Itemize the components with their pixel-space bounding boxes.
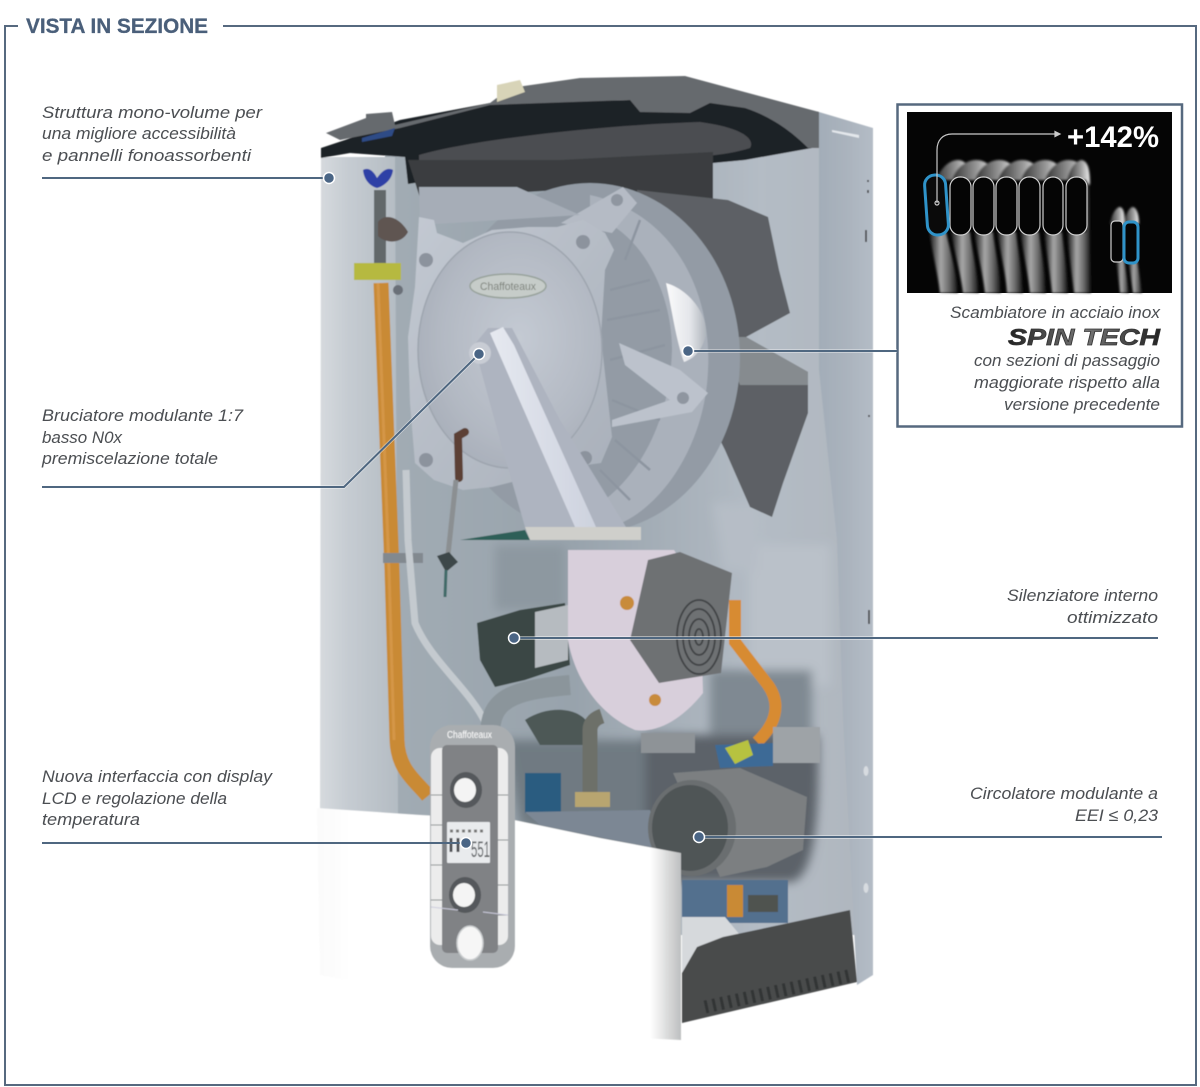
- dark rear ducts: [637, 190, 808, 517]
- interior shading: [495, 503, 830, 882]
- lower blue manifold: [682, 880, 788, 973]
- Spin Tech logo: SPIN TECH: [1008, 324, 1160, 350]
- right water pipe: [735, 600, 775, 742]
- fan motor: [630, 552, 732, 683]
- ignition electrode: [437, 432, 465, 597]
- heat exchanger body: [419, 183, 740, 533]
- annotation: circulator: Circolatore modulante a: [970, 784, 1158, 803]
- right side panel: [819, 112, 873, 985]
- lower knob: [449, 877, 481, 913]
- left wall: [320, 157, 398, 815]
- annotation: interface: temperatura: [42, 810, 140, 829]
- leader: structure: [42, 172, 334, 184]
- annotation: silencer: Silenziatore interno: [1007, 586, 1158, 605]
- circulator pump: [648, 768, 807, 877]
- boiler cutaway illustration: [317, 76, 873, 1040]
- callout text: maggiorate rispetto alla: [974, 373, 1160, 392]
- title: VISTA IN SEZIONE: [26, 15, 208, 38]
- annotation: circulator: [970, 784, 1159, 825]
- burner disc: [418, 232, 602, 468]
- brand logo: Chaffoteaux: [447, 730, 492, 741]
- percentage figure: +142%: [1067, 121, 1159, 154]
- leader: circulator: [694, 832, 1162, 842]
- dark band below cover: [408, 152, 713, 205]
- pressure gauge: [457, 926, 483, 960]
- annotation: structure: Struttura mono-volume per: [42, 103, 263, 122]
- leader: burner: [42, 348, 484, 487]
- tubes: [929, 160, 1142, 293]
- upper knob: [450, 772, 482, 808]
- lower interior pipework: [490, 685, 665, 850]
- annotation: interface: [42, 767, 274, 829]
- annotation: burner: Bruciatore modulante 1:7: [42, 406, 244, 425]
- annotation: burner: [41, 406, 244, 468]
- leader: interface: [42, 838, 472, 848]
- control panel: [430, 725, 515, 968]
- annotation: structure: e pannelli fonoassorbenti: [42, 146, 252, 165]
- LCD display: 551: [471, 837, 490, 862]
- burner arm: [460, 327, 641, 540]
- callout text: versione precedente: [1004, 395, 1160, 414]
- front white panel: [317, 808, 681, 1040]
- back wall: [385, 145, 855, 935]
- left gas pipe and fittings: [354, 169, 485, 796]
- annotation: structure: una migliore accessibilità: [42, 124, 236, 143]
- callout text: Scambiatore in acciaio inox: [950, 303, 1160, 322]
- callout text: con sezioni di passaggio: [974, 351, 1160, 370]
- heat exchanger callout box: [898, 104, 1182, 426]
- bottom tray: [682, 910, 857, 1023]
- leader: silencer: [508, 632, 1158, 644]
- tube cross-section image: [907, 112, 1172, 293]
- tube openings: [950, 177, 1123, 262]
- fan housing: [568, 550, 732, 730]
- annotation: silencer: [1007, 586, 1158, 627]
- annotation: interface: LCD e regolazione della: [42, 789, 227, 808]
- annotation: burner: basso N0x: [42, 428, 122, 447]
- brand badge: Chaffoteaux: [480, 281, 536, 293]
- valves above pump: [641, 727, 820, 768]
- pointer arrow: [935, 132, 1060, 205]
- leader: heat exchanger: [682, 346, 897, 356]
- brand badge: [470, 274, 546, 298]
- burner front plate: [393, 217, 614, 490]
- LCD display: [447, 822, 490, 863]
- highlighted openings: [924, 174, 1138, 263]
- annotation: circulator: EEI ≤ 0,23: [1075, 806, 1159, 825]
- top cover: [321, 76, 819, 205]
- annotation: burner: premiscelazione totale: [41, 449, 218, 468]
- callout text: [950, 303, 1160, 414]
- silencer: [477, 603, 570, 687]
- annotation: structure: [42, 103, 263, 165]
- annotation: interface: Nuova interfaccia con display: [42, 767, 274, 786]
- annotation: silencer: ottimizzato: [1067, 608, 1158, 627]
